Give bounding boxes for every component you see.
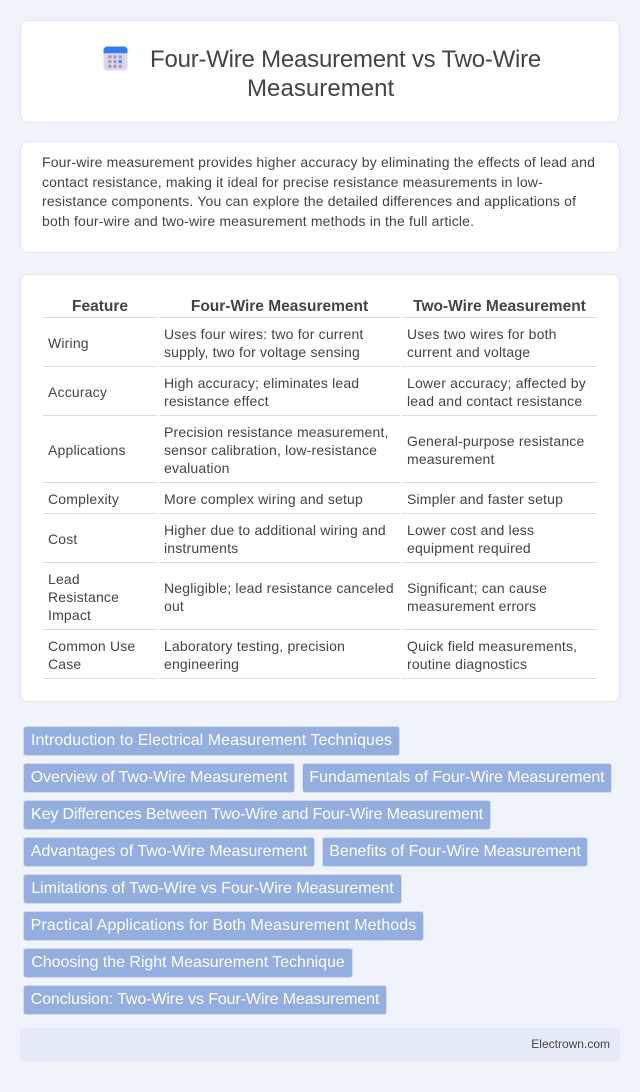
tag: four-wire fundamentals [302, 763, 612, 793]
tag: conclusion: Conclusion: Two-Wire vs Four-Wire Measurement [31, 991, 379, 1008]
tag: two-wire overview [23, 763, 295, 793]
tag: introduction: Introduction to Electrical Measurement Techniques [31, 732, 392, 749]
title: Four-Wire Measurement vs Two-Wire [150, 46, 541, 73]
tag: conclusion [23, 985, 387, 1015]
intro text: contact resistance, making it ideal for precise resistance measurements in low- [42, 174, 543, 190]
comparison table: Wiring [48, 335, 89, 351]
comparison table: Accuracy [48, 384, 107, 400]
tag: key differences [23, 800, 491, 830]
footer [20, 1028, 620, 1062]
comparison table: Feature [72, 298, 128, 315]
comparison table: Impact [48, 607, 91, 623]
comparison table: Complexity [48, 491, 119, 507]
intro text: Four-wire measurement provides higher accuracy by eliminating the effects of lead and [42, 154, 595, 170]
tag: two-wire advantages: Advantages of Two-Wire Measurement [31, 843, 307, 860]
tag: choosing technique: Choosing the Right Measurement Technique [31, 954, 345, 971]
comparison table: Uses four wires: two for current [164, 326, 363, 342]
comparison table: equipment required [407, 540, 531, 556]
comparison table: Lower cost and less [407, 522, 534, 538]
comparison table: Common Use [48, 638, 135, 654]
comparison table: out [164, 598, 184, 614]
icon: calendar [104, 46, 128, 70]
tag: key differences: Key Differences Between Two-Wire and Four-Wire Measurement [31, 806, 483, 823]
tag: choosing technique [23, 948, 353, 978]
tag: four-wire benefits: Benefits of Four-Wire Measurement [329, 843, 581, 860]
comparison table: sensor calibration, low-resistance [164, 442, 377, 458]
tag: practical applications: Practical Applications for Both Measurement Methods [31, 917, 416, 934]
title: Measurement [247, 75, 394, 102]
comparison table: Negligible; lead resistance canceled [164, 580, 394, 596]
comparison table: current and voltage [407, 344, 530, 360]
comparison table: engineering [164, 656, 239, 672]
comparison table: General-purpose resistance [407, 433, 584, 449]
comparison table: supply, two for voltage sensing [164, 344, 360, 360]
comparison table: evaluation [164, 460, 230, 476]
comparison table: Applications [48, 442, 126, 458]
tag: limitations: Limitations of Two-Wire vs Four-Wire Measurement [31, 880, 394, 897]
tag: four-wire fundamentals: Fundamentals of Four-Wire Measurement [309, 769, 605, 786]
comparison table: measurement errors [407, 598, 536, 614]
tag: introduction [23, 726, 400, 756]
comparison table: Quick field measurements, [407, 638, 577, 654]
comparison table: Case [48, 656, 81, 672]
comparison table: More complex wiring and setup [164, 491, 363, 507]
comparison table: Uses two wires for both [407, 326, 557, 342]
comparison table: Significant; can cause [407, 580, 547, 596]
intro text: both four-wire and two-wire measurement methods in the full article. [42, 213, 474, 229]
intro text: resistance components. You can explore the detailed differences and applications of [42, 193, 576, 209]
comparison table: lead and contact resistance [407, 393, 582, 409]
comparison table: Precision resistance measurement, [164, 424, 389, 440]
footer: Electrown.com [531, 1037, 610, 1051]
comparison table: Lower accuracy; affected by [407, 375, 586, 391]
comparison table: Lead [48, 571, 80, 587]
comparison table panel [20, 274, 620, 702]
comparison table: routine diagnostics [407, 656, 527, 672]
comparison table: Four-Wire Measurement [191, 298, 368, 315]
intro panel [20, 141, 620, 253]
comparison table: Resistance [48, 589, 119, 605]
intro text [42, 154, 595, 229]
tag: four-wire benefits [322, 837, 588, 867]
comparison table: Simpler and faster setup [407, 491, 563, 507]
comparison table: Cost [48, 531, 78, 547]
comparison table: measurement [407, 451, 495, 467]
header card [20, 20, 620, 123]
comparison table: Laboratory testing, precision [164, 638, 345, 654]
comparison table [43, 298, 597, 679]
comparison table: instruments [164, 540, 238, 556]
title [150, 46, 541, 102]
comparison table: Two-Wire Measurement [413, 298, 586, 315]
comparison table: resistance effect [164, 393, 269, 409]
tag: limitations [23, 874, 402, 904]
tag: two-wire overview: Overview of Two-Wire Measurement [31, 769, 287, 786]
tag: two-wire advantages [23, 837, 315, 867]
comparison table: Higher due to additional wiring and [164, 522, 386, 538]
comparison table: High accuracy; eliminates lead [164, 375, 359, 391]
tag: practical applications [23, 911, 424, 941]
